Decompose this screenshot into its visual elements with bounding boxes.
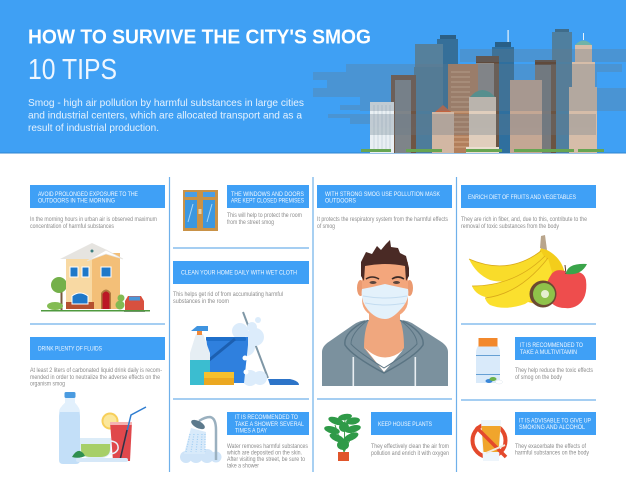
heading box: ENRICH DIET OF FRUITS AND VEGETABLES <box>468 195 576 201</box>
illustration: bananas, kiwi and apple <box>469 235 587 308</box>
heading box <box>317 185 452 208</box>
heading box: TAKE A SHOWER SEVERAL <box>235 422 305 428</box>
intro paragraph: result of industrial production. <box>28 122 159 134</box>
icon: drinks <box>59 392 146 464</box>
heading box <box>515 412 596 435</box>
intro paragraph: Smog - high air pollution by harmful substances in large cities <box>28 97 304 109</box>
body text: pollution and enrich it with oxygen <box>371 451 449 457</box>
heading box: WITH STRONG SMOG USE POLLUTION MASK <box>325 192 440 198</box>
heading box: AVOID PROLONGED EXPOSURE TO THE <box>38 192 138 198</box>
heading box: IT IS RECOMMENDED TO <box>235 415 298 421</box>
body text: concentration of harmful substances <box>30 224 114 230</box>
smog layers <box>313 49 626 135</box>
heading box <box>227 412 309 435</box>
panel: fruits and vegetables <box>461 185 596 308</box>
body text <box>30 368 162 388</box>
icon: house <box>41 243 150 312</box>
body text: They effectively clean the air from <box>371 444 449 450</box>
body text <box>371 444 449 457</box>
body text: take a shower <box>227 464 259 470</box>
icon: cleaning supplies <box>190 312 299 386</box>
body text: mended in order to neutralize the adverse effects on the <box>30 375 161 381</box>
body text: After visiting the street, be sure to <box>227 457 306 463</box>
body text: of smog <box>317 224 335 230</box>
panel: avoid morning exposure <box>30 185 165 312</box>
bushes <box>361 149 604 152</box>
heading box: TAKE A MULTIVITAMIN <box>520 350 577 356</box>
body text: substances in the room <box>173 299 229 305</box>
body text <box>515 444 589 456</box>
body text: This helps get rid of from accumulating harmful <box>173 292 283 298</box>
heading box <box>515 337 596 360</box>
body text: It protects the respiratory system from the harmful effects <box>317 217 448 223</box>
body text: from the street smog <box>227 220 274 226</box>
body text: They help reduce the toxic effects <box>515 368 593 374</box>
icon: window <box>183 190 218 231</box>
icon: vitamin bottle <box>476 338 502 384</box>
illustration: man in mask <box>322 240 448 386</box>
heading box: OUTDOORS IN THE MORNING <box>38 198 115 204</box>
heading box: ARE KEPT CLOSED PREMISES <box>231 198 304 204</box>
body text: organism smog <box>30 382 65 388</box>
icon: potted plant <box>323 413 362 461</box>
body text <box>30 217 157 230</box>
heading box: TIMES A DAY <box>235 428 267 434</box>
header banner <box>0 0 626 154</box>
body text: removal of toxic substances from the body <box>461 224 559 230</box>
panel: windows and doors <box>183 185 309 231</box>
body text: At least 2 liters of carbonated liquid drink daily is recom- <box>30 368 162 374</box>
body text: In the morning hours in urban air is observed maximum <box>30 217 157 223</box>
body text <box>173 292 283 305</box>
heading box: OUTDOORS <box>325 198 356 204</box>
intro paragraph <box>28 97 304 134</box>
body text <box>515 368 593 381</box>
heading box: CLEAN YOUR HOME DAILY WITH WET CLOTH <box>181 270 297 276</box>
heading box <box>227 185 309 208</box>
panel: take a shower <box>180 412 309 470</box>
intro paragraph: and industrial centers, which are allocated transport and as a <box>28 110 302 122</box>
heading box: IT IS RECOMMENDED TO <box>520 343 583 349</box>
panel: keep house plants <box>323 412 452 461</box>
panel: clean your home <box>173 261 309 386</box>
body text <box>226 444 308 470</box>
heading box: KEEP HOUSE PLANTS <box>378 422 432 428</box>
illustration: city skyline with smog <box>313 29 626 153</box>
body text <box>227 213 302 226</box>
body text: which are deposited on the skin. <box>226 450 302 456</box>
panel: multivitamin <box>476 337 596 384</box>
body text: They exacerbate the effects of <box>515 444 586 450</box>
body text: They are rich in fiber, and, due to this, contribute to the <box>461 217 588 223</box>
panel: pollution mask <box>317 185 452 386</box>
body text: Water removes harmful substances <box>227 444 308 450</box>
body text: harmful substances on the body <box>515 450 589 456</box>
body text <box>317 217 448 230</box>
subtitle: 10 tips: 10 TIPS <box>28 54 117 86</box>
title: HOW TO SURVIVE THE CITY'S SMOG <box>28 26 371 48</box>
body text <box>461 217 588 230</box>
body text: This will help to protect the room <box>227 213 302 219</box>
panel: drink plenty of fluids <box>30 337 165 464</box>
heading box <box>30 185 165 208</box>
heading box: THE WINDOWS AND DOORS <box>231 192 304 198</box>
icon: no smoking or alcohol <box>472 420 506 461</box>
heading box: IT IS ADVISABLE TO GIVE UP <box>519 418 591 424</box>
panel: give up smoking and alcohol <box>472 412 596 461</box>
icon: shower <box>180 417 222 463</box>
body text: of smog on the body <box>515 375 562 381</box>
heading box: DRINK PLENTY OF FLUIDS <box>38 346 102 352</box>
heading box: SMOKING AND ALCOHOL <box>519 425 586 431</box>
